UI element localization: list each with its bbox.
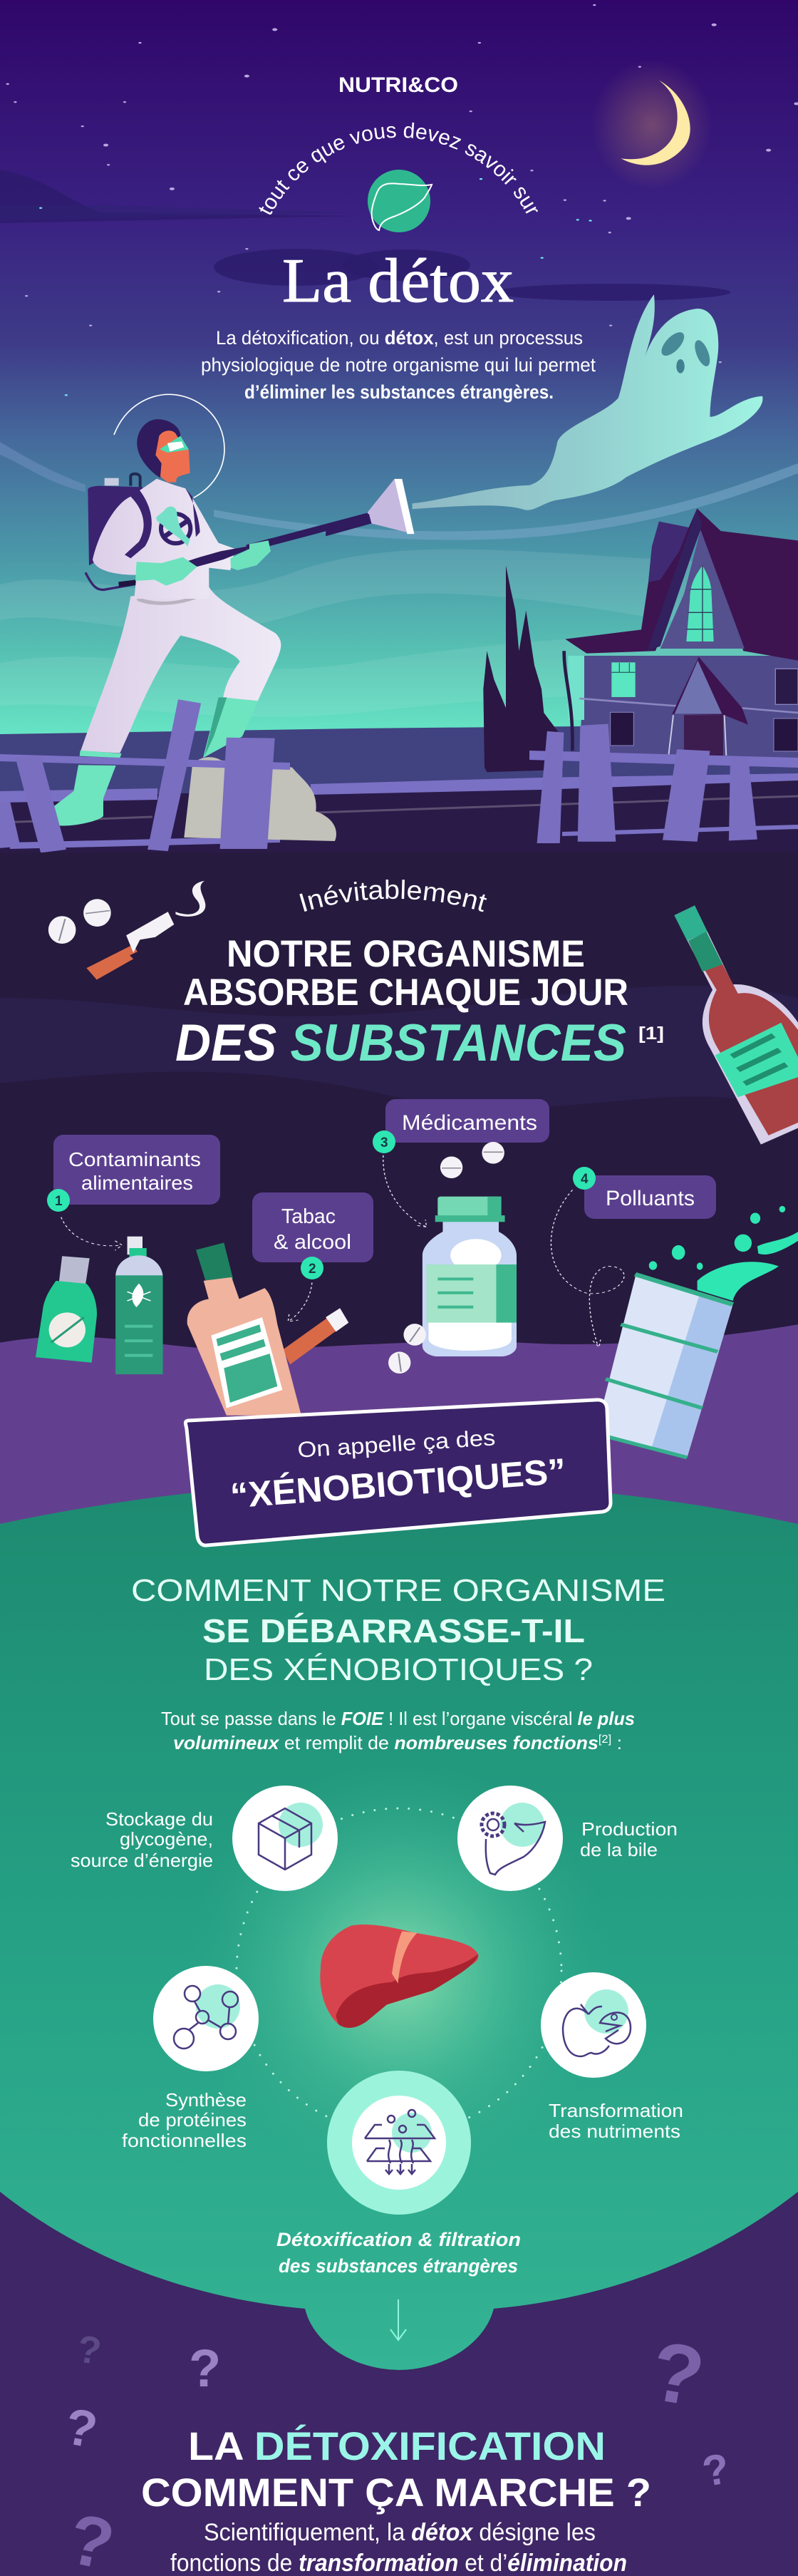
dashed arrows (61, 1155, 624, 1347)
illustration: dead trees (483, 565, 563, 772)
section background: waves (0, 986, 798, 1112)
callout: tabac et alcool (252, 1192, 373, 1279)
illustration: pills and cigarette (48, 881, 205, 979)
label: nutriments: des nutriments (549, 2121, 680, 2142)
illustration: haunted house (564, 508, 798, 758)
icon circle: protéines (153, 1966, 259, 2071)
callout: tabac et alcool: 2 (309, 1262, 316, 1277)
illustration: pill bottle (388, 1142, 517, 1374)
illustration: top fence rail (0, 754, 290, 770)
label: stockage: Stockage du (105, 1808, 213, 1830)
helmet ring (114, 394, 224, 498)
intro text: La détoxification, ou détox, est un processus (216, 327, 583, 349)
bottom section background (0, 2192, 798, 2576)
callout: contaminants (47, 1135, 220, 1212)
label: protéines: fonctionnelles (122, 2130, 247, 2151)
label: stockage: source d’énergie (71, 1850, 213, 1871)
heading: substances: [1] (638, 1024, 664, 1044)
icon circle: stockage (232, 1786, 338, 1891)
label: détoxification (276, 2229, 521, 2277)
callout: contaminants: 1 (55, 1194, 63, 1209)
gloves (135, 557, 197, 586)
heading: comment se débarrasse: COMMENT NOTRE ORGANISME (131, 1573, 665, 1608)
heading: la détoxification (141, 2423, 651, 2515)
curved word: Inévitablement: Inévitablement (299, 880, 487, 912)
callout: contaminants: alimentaires (81, 1172, 193, 1194)
illustration: cigarette and big bottle (187, 1242, 348, 1416)
label: détoxification: des substances étrangères (279, 2255, 518, 2277)
sky clouds and waves (0, 170, 798, 717)
callout: xénobiotiques: “XÉNOBIOTIQUES” (229, 1451, 567, 1516)
intro text: physiologique de notre organisme qui lui permet (201, 354, 596, 376)
intro: le foie: : (611, 1732, 622, 1753)
head (137, 419, 180, 478)
heading: substances (175, 933, 664, 1072)
closing text: Scientifiquement, la détox désigne les (204, 2519, 596, 2546)
question marks: ? (699, 2444, 732, 2495)
callout: xénobiotiques (185, 1400, 611, 1545)
question marks: ? (75, 2327, 104, 2373)
callout: polluants (573, 1167, 716, 1219)
question marks: ? (189, 2339, 221, 2398)
section ground: purple (0, 1324, 798, 1582)
dotted ring (237, 1808, 561, 2133)
illustration: rock (184, 757, 336, 841)
gun grip (176, 547, 247, 569)
arrow down (390, 2299, 406, 2340)
heading: comment se débarrasse: DES XÉNOBIOTIQUES ? (204, 1652, 593, 1687)
question marks: ? (61, 2398, 101, 2459)
intro: le foie (161, 1708, 635, 1753)
callout: xénobiotiques: On appelle ça des (297, 1425, 496, 1463)
callout: contaminants: Contaminants (68, 1148, 201, 1170)
heading: substances: DES SUBSTANCES (175, 1014, 626, 1072)
icon: liver badge (368, 170, 432, 232)
label: nutriments: Transformation (549, 2100, 683, 2121)
icon circle: détoxification (327, 2071, 471, 2215)
callout: médicaments: Médicaments (402, 1111, 537, 1135)
illustration: character upper body (86, 394, 373, 599)
question marks (61, 2324, 732, 2576)
illustration: legs of the character (53, 587, 281, 826)
closing text (170, 2519, 627, 2576)
background: night sky (0, 0, 798, 734)
label: bile: Production (581, 1818, 678, 1840)
title: La détox: La détox (282, 247, 514, 316)
icon circle: bile (457, 1786, 563, 1891)
backpack (86, 474, 147, 589)
heading: comment se débarrasse (131, 1573, 665, 1687)
stars (6, 4, 798, 396)
icon circle: nutriments (541, 1972, 646, 2078)
illustration: gun nozzle (368, 479, 413, 534)
intro: le foie: Tout se passe dans le FOIE ! Il est l’organe viscéral le plus (161, 1708, 635, 1729)
closing text: fonctions de transformation et d’élimination (170, 2550, 627, 2576)
illustration: ghost (413, 294, 762, 510)
label: nutriments (549, 2100, 683, 2142)
illustration: wine bottle (674, 905, 798, 1145)
central glow (185, 1761, 613, 2188)
emblem (156, 507, 190, 547)
label: détoxification: Détoxification & filtration (276, 2229, 521, 2250)
callout: médicaments: 3 (380, 1135, 388, 1150)
heading: la détoxification: LA DÉTOXIFICATION (188, 2423, 606, 2468)
heading: substances: NOTRE ORGANISME (227, 933, 585, 975)
illustration: fence planks (0, 699, 757, 852)
green section: liver functions (0, 1481, 798, 2370)
intro: le foie: volumineux et remplit de nombreuses fonctions (173, 1732, 593, 1753)
label: protéines: Synthèse (165, 2089, 247, 2111)
label: protéines: de protéines (138, 2109, 247, 2131)
question marks: ? (644, 2324, 711, 2425)
label: bile: de la bile (580, 1839, 658, 1860)
callout: tabac et alcool: & alcool (274, 1231, 351, 1254)
ground behind fence (0, 724, 798, 861)
illustration: lower fence rails (0, 751, 798, 849)
heading: substances: ABSORBE CHAQUE JOUR (183, 972, 628, 1014)
label: stockage (71, 1808, 213, 1871)
intro text (201, 327, 596, 403)
intro: le foie: [2] (598, 1733, 611, 1746)
illustration: liver (320, 1925, 478, 2028)
curved subtitle: tout ce que vous devez savoir sur (259, 123, 539, 215)
label: stockage: glycogène, (120, 1828, 213, 1850)
section background: dark (0, 852, 798, 1565)
illustration: small bottle and spray (36, 1237, 163, 1374)
suit torso and arms (93, 479, 235, 599)
callout: médicaments (373, 1099, 549, 1153)
label: protéines (122, 2089, 247, 2151)
label: bile (580, 1818, 678, 1860)
heading: comment se débarrasse: SE DÉBARRASSE-T-IL (202, 1612, 585, 1649)
heading: la détoxification: COMMENT ÇA MARCHE ? (141, 2470, 651, 2515)
gun barrel (247, 515, 373, 548)
callout: tabac et alcool: Tabac (281, 1205, 336, 1228)
callout: polluants: Polluants (606, 1187, 695, 1210)
icon: moon (591, 59, 712, 190)
intro text: d’éliminer les substances étrangères. (244, 381, 554, 403)
illustration: barrel and splash (596, 1206, 798, 1458)
callout: polluants: 4 (581, 1172, 589, 1187)
logo: NUTRI&CO: NUTRI&CO (338, 73, 458, 97)
